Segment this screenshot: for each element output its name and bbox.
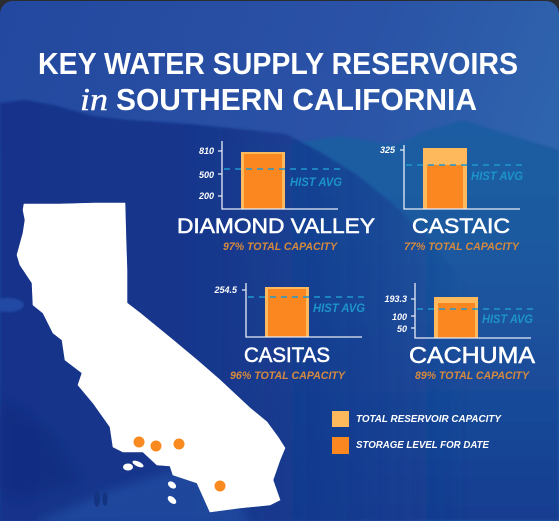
bar: Diamond Valley storage xyxy=(244,154,282,209)
map: California xyxy=(17,203,285,512)
label: hist avg: HIST AVG xyxy=(290,175,342,189)
name: Castaic: CASTAIC xyxy=(412,215,510,238)
state outline xyxy=(17,203,285,512)
historical average line: Casitas xyxy=(248,296,365,298)
bar: Castaic capacity xyxy=(423,148,467,209)
axes: Castaic xyxy=(400,145,520,209)
title xyxy=(38,46,518,117)
axes: Cachuma xyxy=(411,283,531,338)
panel: Diamond Valley xyxy=(177,141,375,253)
legend xyxy=(332,411,502,454)
islands xyxy=(123,459,178,506)
legend swatch: capacity xyxy=(332,411,349,427)
axis value: Castaic: 325 xyxy=(380,145,396,155)
capacity: Diamond Valley: 97% TOTAL CAPACITY xyxy=(223,241,339,253)
axis values: Cachuma: 50 xyxy=(397,324,407,334)
capacity: Casitas: 96% TOTAL CAPACITY xyxy=(230,370,347,382)
historical average line: Diamond Valley xyxy=(224,168,341,170)
axis values: Diamond Valley: 810 xyxy=(199,146,214,156)
title: KEY WATER SUPPLY RESERVOIRS xyxy=(38,46,518,81)
axis value: Casitas: 254.5 xyxy=(213,285,238,295)
panel: Casitas xyxy=(213,283,365,382)
capacity: Castaic: 77% TOTAL CAPACITY xyxy=(404,241,521,253)
reservoir markers xyxy=(134,436,226,492)
label: hist avg: HIST AVG xyxy=(471,169,523,183)
bar: Cachuma capacity xyxy=(434,297,478,338)
axis values: Cachuma: 100 xyxy=(392,312,407,322)
panel: Castaic xyxy=(380,145,523,253)
name: Diamond Valley: DIAMOND VALLEY xyxy=(177,215,375,238)
axis values: Cachuma: 193.3 xyxy=(384,294,407,304)
capacity: Cachuma: 89% TOTAL CAPACITY xyxy=(415,370,531,382)
figures walking xyxy=(94,491,108,507)
bar: Casitas storage xyxy=(268,289,306,337)
historical average line: Castaic xyxy=(406,164,523,166)
label: hist avg: HIST AVG xyxy=(482,312,533,326)
legend text: storage: STORAGE LEVEL FOR DATE xyxy=(356,440,489,451)
axes: Casitas xyxy=(242,283,362,337)
panel: Cachuma xyxy=(384,283,536,382)
legend swatch: storage xyxy=(332,437,349,454)
label: hist avg: HIST AVG xyxy=(313,301,365,315)
bar: Diamond Valley capacity xyxy=(241,152,285,209)
axis values: Cachuma xyxy=(384,294,407,334)
bar: Castaic storage xyxy=(427,165,463,209)
name: Casitas: CASITAS xyxy=(244,344,330,367)
axis values: Diamond Valley: 200 xyxy=(198,191,214,201)
title: in xyxy=(80,81,108,117)
axis values: Diamond Valley xyxy=(198,146,214,201)
bar: Casitas capacity xyxy=(265,287,309,337)
legend text: capacity: TOTAL RESERVOIR CAPACITY xyxy=(356,414,502,425)
historical average line: Cachuma xyxy=(417,308,534,310)
axis values: Diamond Valley: 500 xyxy=(199,170,214,180)
title: SOUTHERN CALIFORNIA xyxy=(116,82,477,117)
axes: Diamond Valley xyxy=(218,141,338,209)
bar: Cachuma storage xyxy=(438,303,475,338)
name: Cachuma: CACHUMA xyxy=(409,342,536,368)
